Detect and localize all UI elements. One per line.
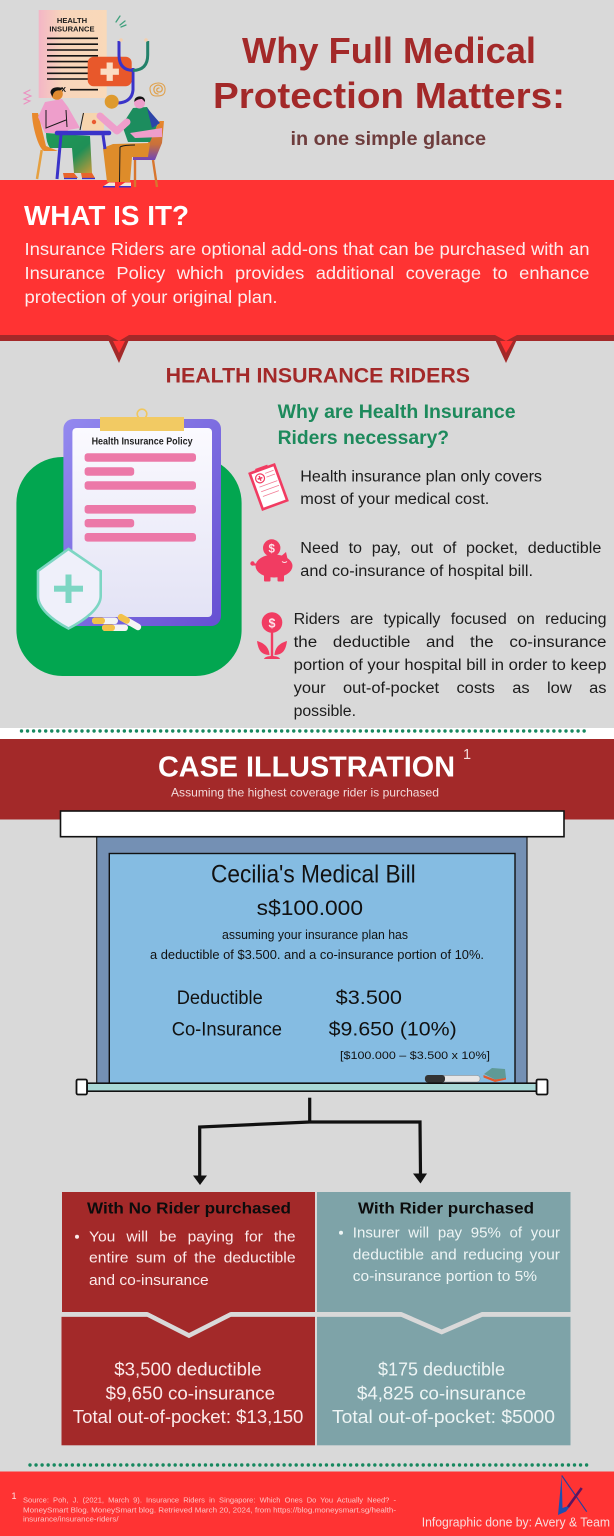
definition text: Insurance Policy which provides additional coverage to enhance [24,263,590,283]
definition text [24,239,590,307]
assumptions [150,928,484,962]
with rider totals: $4,825 co-insurance [357,1383,526,1403]
shield with plus [38,549,101,628]
dark band [0,335,614,341]
no rider heading: With No Rider purchased [87,1200,291,1217]
no rider description: entire sum of the deductible [89,1250,296,1267]
co-insurance row: Co-Insurance [172,1019,282,1041]
clipboard [63,419,221,626]
stethoscope [105,38,148,109]
left person [38,87,95,178]
insurance document: X [61,85,66,94]
text: riders reduce deductible: Riders are typically focused on reducing [294,611,606,628]
left person trousers [46,133,92,173]
callout pointer: right [493,335,519,363]
panel: footer [0,1472,614,1536]
co-insurance row: $9.650 (10%) [329,1019,457,1041]
right chair [133,121,164,187]
logo [558,1476,587,1515]
policy heading: Health Insurance Policy [92,437,193,448]
chevron [317,1314,570,1332]
left person head [51,88,63,100]
panel: with rider [317,1192,570,1445]
policy lines [85,453,196,542]
whiteboard: cecilia's medical bill [60,811,564,1094]
right person arms [100,116,127,131]
illustration: insurance policy clipboard [16,409,242,676]
right person head [134,98,145,108]
text: need to pay out of pocket: Need to pay, out of pocket, deductible [300,540,601,557]
pills [92,613,142,631]
heading: case illustration: CASE ILLUSTRATION [158,752,455,784]
text: plan only covers most: most of your medical cost. [300,491,489,508]
right person shirt [122,107,158,142]
heading: what is it: WHAT IS IT? [24,200,189,231]
left chair [32,113,58,179]
right person trousers [103,143,150,187]
no rider totals: $9,650 co-insurance [106,1383,275,1403]
rail caps [76,1080,548,1094]
with rider description: co-insurance portion to 5% [353,1268,537,1285]
with rider top box [317,1192,570,1329]
panel: what is it [0,180,614,363]
insurance document [39,10,107,98]
assumptions: a deductible of $3.500. and a co-insurance portion of 10%. [150,948,484,962]
heading: why are riders necessary [278,401,516,449]
board surface [109,854,515,1084]
left person shoes [63,173,78,178]
no rider description: and co-insurance [89,1272,209,1289]
no rider description [75,1228,296,1289]
banner subheading: Assuming the highest coverage rider is purchased [171,786,439,800]
icon: medical clipboard [249,462,287,509]
with rider totals [332,1359,555,1427]
with rider description: Insurer will pay 95% of your [353,1225,560,1242]
panel: case illustration banner [0,739,614,820]
no rider totals: Total out-of-pocket: $13,150 [73,1407,303,1427]
deductible row: $3.500 [336,987,402,1009]
source citation: MoneySmart Blog. MoneySmart blog. Retrieved March 20, 2024, from https://blog.moneysmart.sg/health- [23,1505,397,1514]
calculation note: [$100.000 – $3.500 x 10%] [340,1050,490,1062]
text: plan only covers most: Health insurance plan only covers [300,469,542,486]
title: Why Full Medical [242,30,536,71]
source citation [23,1495,397,1524]
no rider result box [62,1317,315,1445]
top roller [60,811,564,837]
left person shirt [38,99,80,133]
icon: money plant [257,612,287,659]
credit: Infographic done by: Avery & Team [422,1516,610,1530]
arrow: split to both rider outcomes [193,1098,427,1185]
icon: piggy bank: $ [268,544,275,556]
bill heading: Cecilia's Medical Bill [211,861,416,889]
title [213,30,565,116]
text: plan only covers most [300,469,542,508]
deductible row [177,987,402,1009]
marker and eraser [425,1068,506,1082]
with rider totals: Total out-of-pocket: $5000 [332,1407,555,1427]
title: Protection Matters: [213,75,565,116]
right person [100,96,162,142]
green backing shape [16,457,242,676]
no rider totals [73,1359,303,1427]
with rider totals: $175 deductible [378,1359,505,1379]
source citation: insurance/insurance-riders/ [23,1515,120,1524]
bill amount: s$100.000 [257,897,363,920]
text: need to pay out of pocket: and co-insurance of hospital bill. [300,563,533,580]
insurance document: HEALTH [57,16,87,25]
paper [72,428,212,617]
subtitle: in one simple glance [290,129,486,150]
decorative marks [24,16,165,104]
clip [100,409,184,431]
chevron [62,1314,315,1336]
text: need to pay out of pocket [300,540,601,580]
no rider description: You will be paying for the [89,1228,296,1245]
with rider description: deductible and reducing your [353,1247,560,1264]
table [57,133,109,179]
text: riders reduce deductible: the deductible and the co-insurance [294,634,606,651]
footnote number: 1 [12,1491,17,1501]
panel: no rider [62,1192,315,1445]
callout pointer: left [106,335,131,363]
no rider top box [62,1192,315,1332]
definition text: Insurance Riders are optional add-ons that can be purchased with an [24,239,590,259]
heading: health insurance riders: HEALTH INSURANCE RIDERS [166,364,470,388]
co-insurance row [172,1019,457,1041]
bottom rail [87,1083,537,1091]
heading: why are riders necessary: Riders necessary? [278,427,449,449]
with rider heading: With Rider purchased [358,1200,534,1217]
icon: money plant: $ [269,616,276,630]
no rider totals: $3,500 deductible [114,1359,262,1379]
with rider description [339,1225,560,1285]
deductible row: Deductible [177,987,263,1009]
source citation: Source: Poh, J. (2021, March 9). Insurance Riders in Singapore: Which Ones Do You Actually Need? - [23,1495,397,1504]
illustration: doctor and patient with health insurance document [24,10,165,187]
text: riders reduce deductible: your out-of-pocket costs as low as [294,680,607,697]
insurance document: INSURANCE [49,24,95,34]
red band [0,180,614,335]
footnote marker: 1 [463,747,471,763]
assumptions: assuming your insurance plan has [222,928,408,942]
stethoscope lower tube [118,68,133,103]
text: riders reduce deductible: portion of your hospital bill in order to keep [294,657,606,674]
text: riders reduce deductible: possible. [294,703,356,720]
whiteboard frame [97,837,527,1084]
definition text: protection of your original plan. [24,287,278,307]
with rider result box [317,1317,570,1445]
heading: why are riders necessary: Why are Health Insurance [278,401,516,423]
laptop [80,113,104,131]
icon: piggy bank [250,539,292,582]
medical cross card [88,57,132,86]
text: riders reduce deductible [294,611,607,720]
